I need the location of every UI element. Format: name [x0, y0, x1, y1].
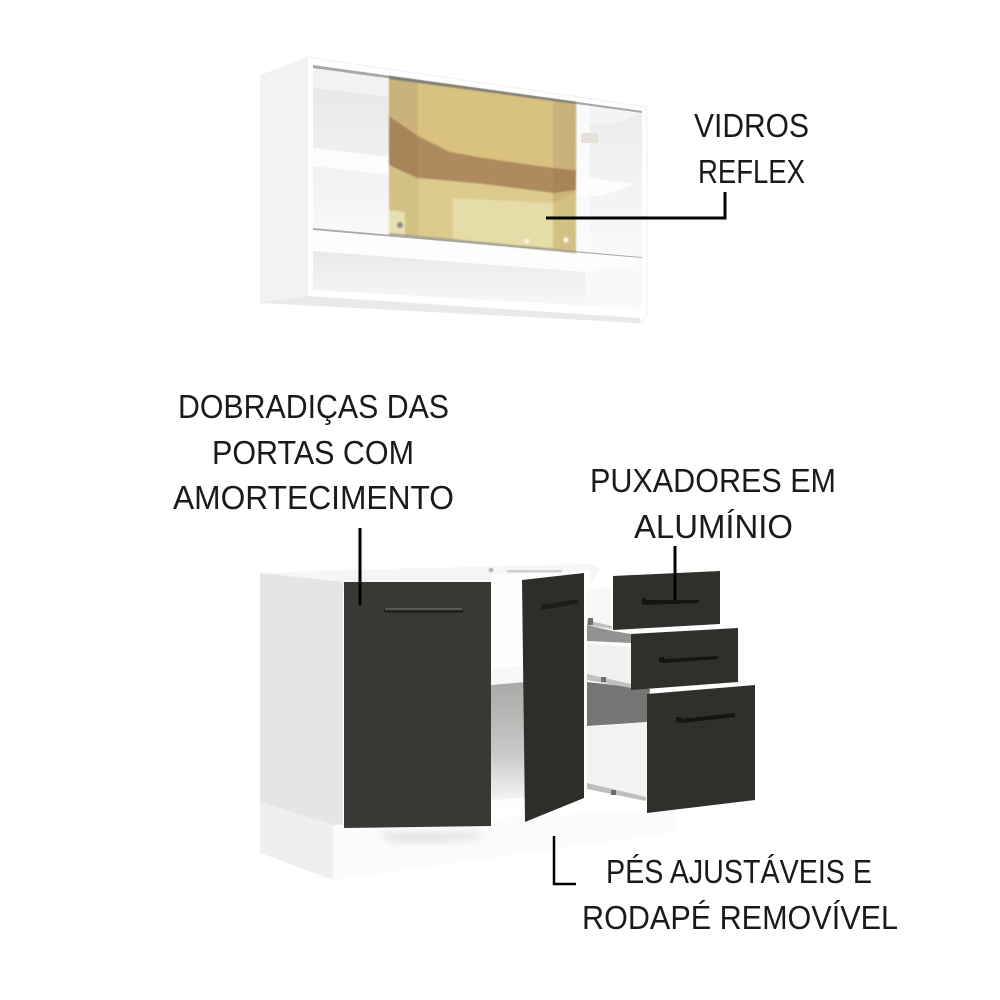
label: RODAPÉ REMOVÍVEL	[582, 899, 898, 936]
middle drawer	[631, 628, 738, 690]
label: PÉS AJUSTÁVEIS E	[606, 853, 872, 890]
leader line	[546, 192, 725, 218]
drawer rails	[587, 618, 646, 801]
label: DOBRADIÇAS DAS	[178, 388, 449, 425]
label: PORTAS COM	[212, 434, 414, 471]
label: REFLEX	[698, 153, 805, 190]
top drawer	[613, 571, 720, 630]
callout: puxadores	[590, 462, 836, 600]
open door	[522, 573, 584, 822]
cabinet body	[260, 57, 647, 323]
label: PUXADORES EM	[590, 462, 836, 499]
reflex glass panel	[389, 76, 576, 253]
label: AMORTECIMENTO	[173, 479, 454, 516]
left door	[344, 582, 491, 828]
cabinet body	[260, 564, 676, 880]
leader line	[674, 546, 676, 600]
callout: vidros reflex	[546, 107, 809, 218]
leader line	[554, 836, 576, 884]
callout: pés ajustáveis	[554, 836, 898, 936]
base cabinet with doors and drawers	[260, 564, 755, 880]
callout: dobradiças	[173, 388, 454, 605]
wall cabinet with reflex glass	[260, 57, 647, 323]
label: VIDROS	[694, 107, 809, 144]
leader line	[358, 528, 362, 605]
label: ALUMÍNIO	[634, 508, 793, 545]
bottom drawer	[647, 685, 755, 813]
